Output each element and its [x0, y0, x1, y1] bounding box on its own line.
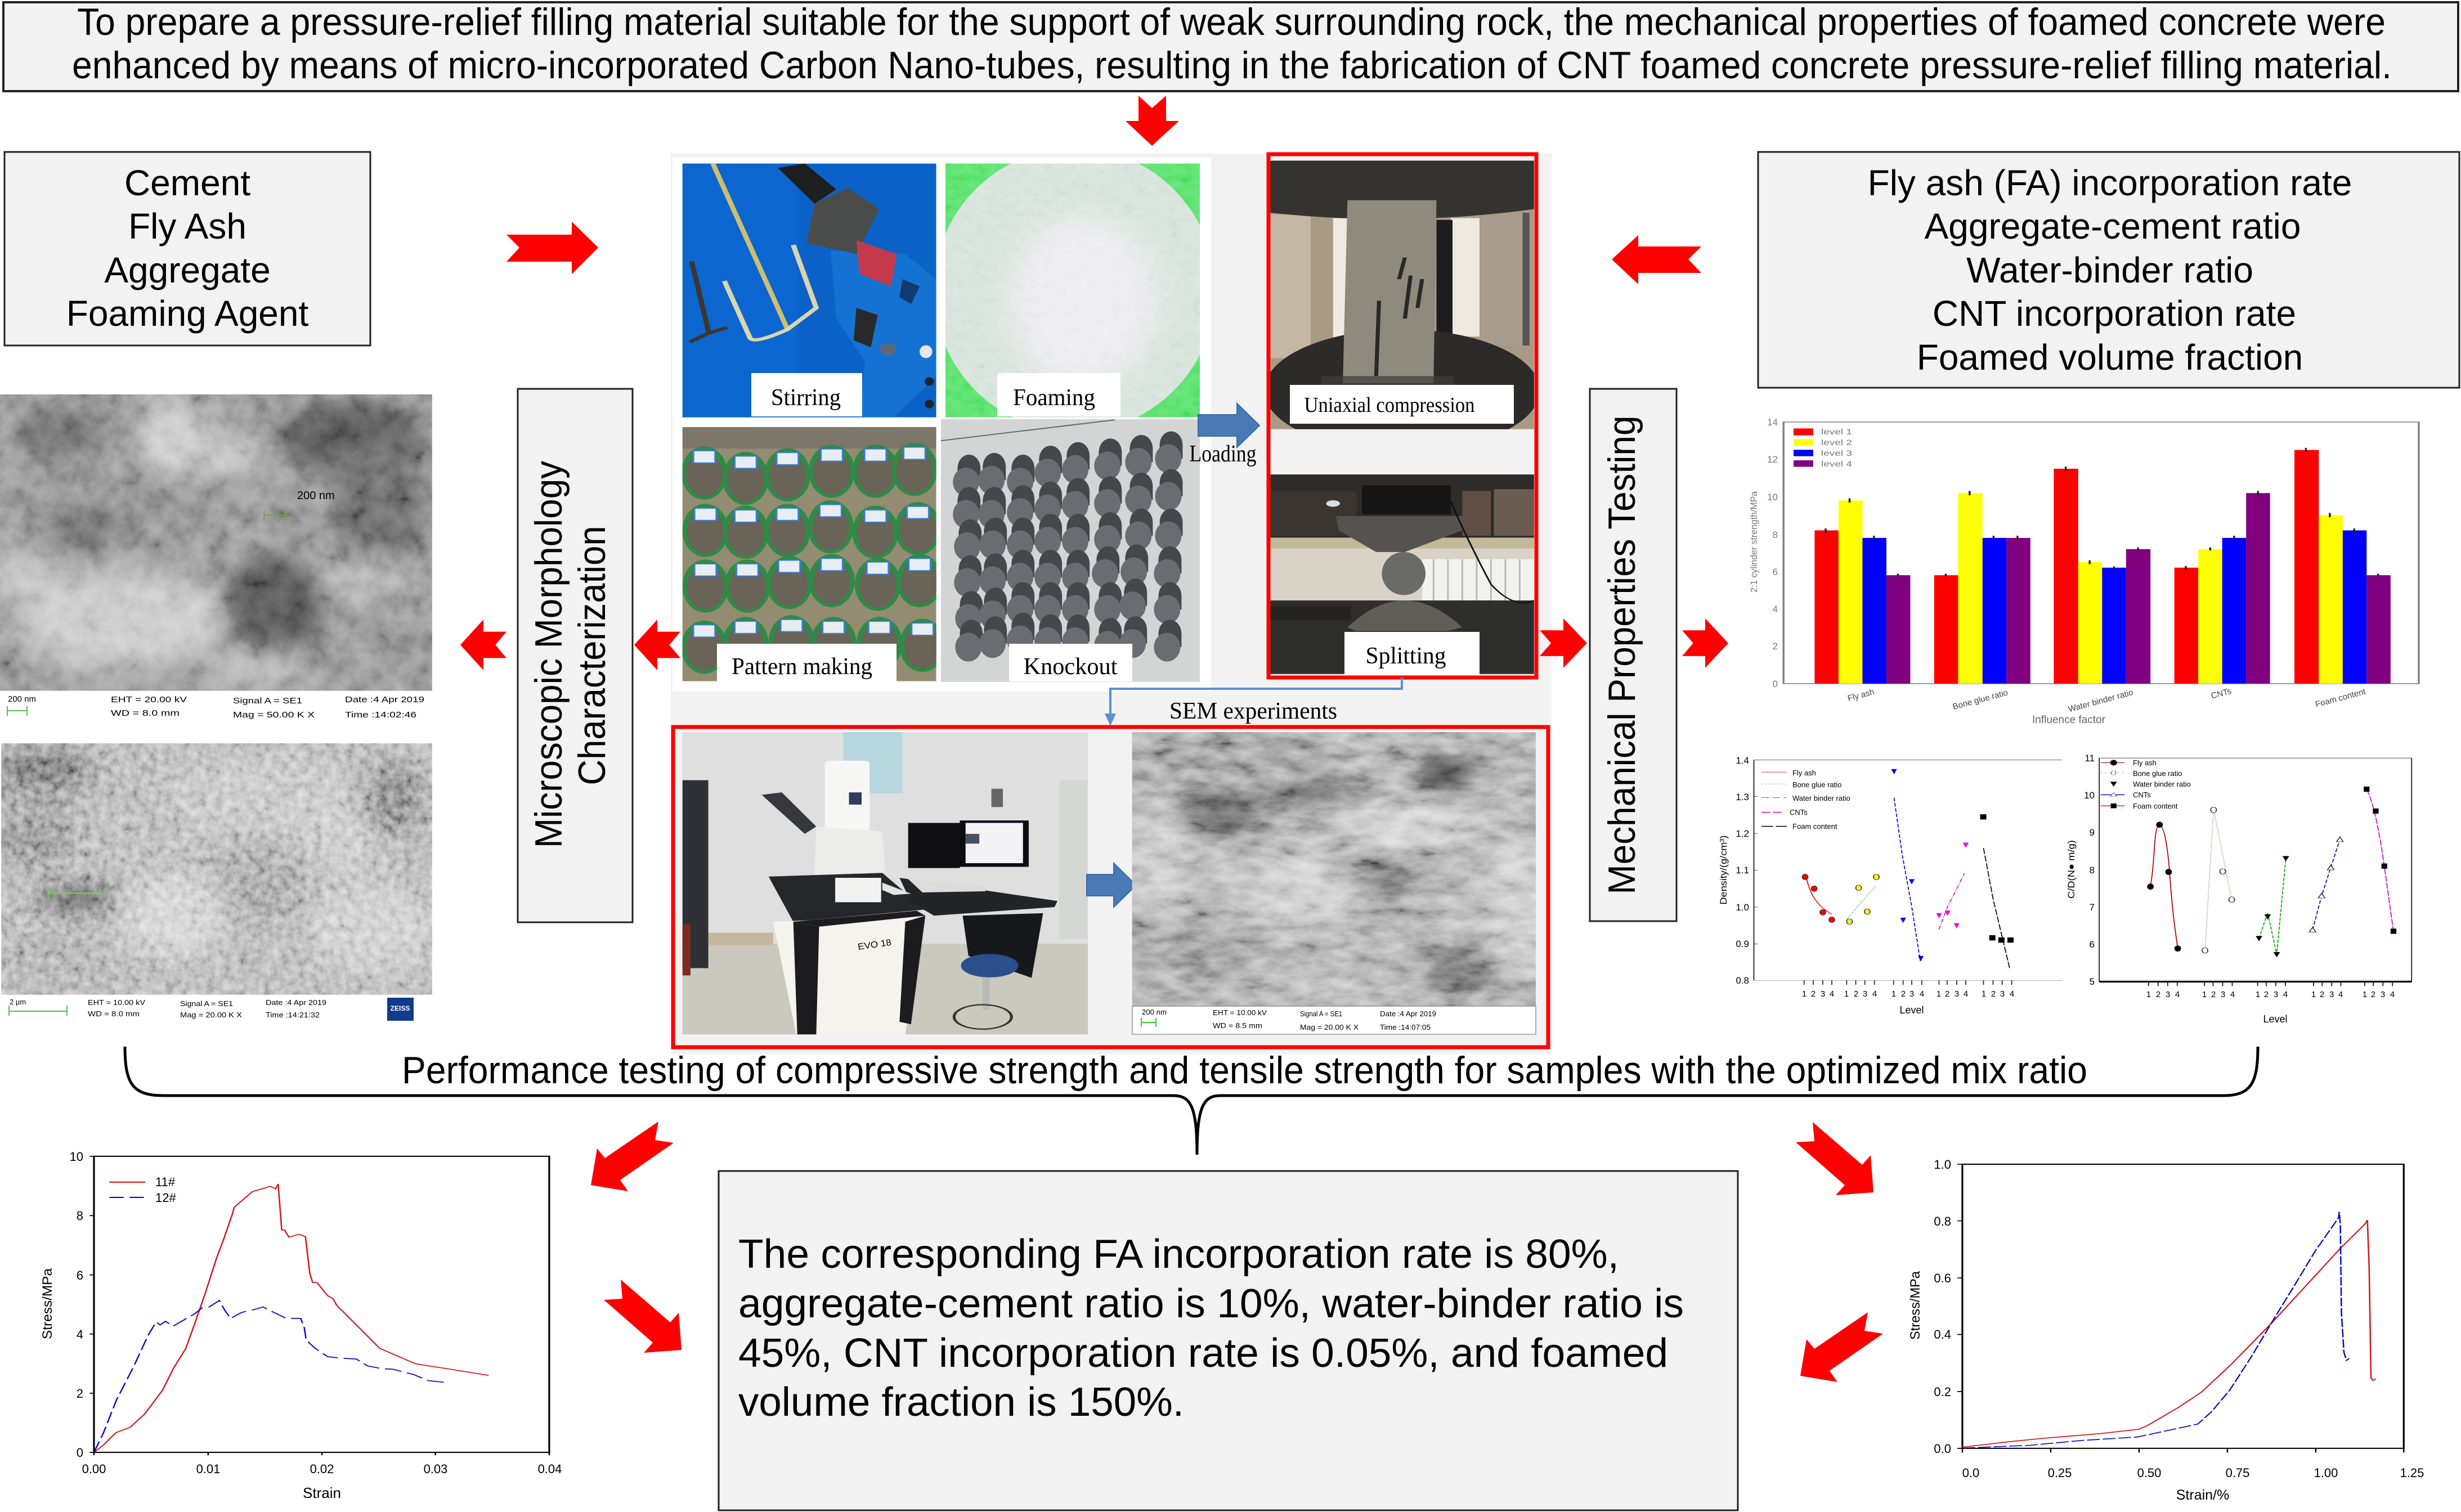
text box: optimized mix ratio result: 45%, CNT incorporation rate is 0.05%, and foamed [738, 1331, 1668, 1376]
text box: mix factors: CNT incorporation rate [1933, 293, 2296, 334]
line chart: C/D by level: 4 [2175, 990, 2180, 999]
line chart: density by level: 2 [1991, 989, 1996, 999]
caption: data bar 200 nm: Time :14:02:46 [345, 710, 416, 720]
text box: microscopic morphology: Microscopic Morphology [527, 461, 570, 848]
label: foaming: Foaming [1013, 385, 1095, 411]
photo: SEM instrument [683, 732, 1088, 1034]
text box: mix factors: Fly ash (FA) incorporation rate [1868, 163, 2352, 203]
line chart: density by level: 1 [1891, 989, 1896, 999]
photo: pattern making molds [682, 427, 945, 681]
caption: data bar 200 nm: Mag = 50.00 K X [233, 710, 315, 720]
line chart: density by level: 4 [1920, 989, 1924, 999]
text box: raw materials: Foaming Agent [66, 293, 308, 334]
text box: mix factors: Aggregate-cement ratio [1925, 206, 2301, 246]
caption: data bar 2 um: Mag = 20.00 K X [180, 1011, 242, 1019]
caption: data bar 2 um: Time :14:21:32 [266, 1011, 320, 1019]
text: performance testing: Performance testing of compressive strength and tensile strength for samples with the optimized mix ratio [402, 1049, 2087, 1092]
line chart: C/D by level [2066, 753, 2411, 1025]
line chart: tensile stress-strain: 1.0 [1934, 1157, 1951, 1172]
line chart: C/D by level: Water binder ratio [2133, 780, 2191, 788]
arrow: to charts [1682, 618, 1728, 668]
caption: SEM micrograph data bar: Mag = 20.00 K X [1300, 1023, 1359, 1031]
text box: optimized mix ratio result: aggregate-cement ratio is 10%, water-binder ratio is [738, 1281, 1684, 1326]
bar chart: cylinder strength by factor: level 4 [1821, 459, 1852, 468]
text box: research aim: To prepare a pressure-relief filling material suitable for the support of weak surrounding rock, the mechanical properties of foamed concrete were [77, 1, 2386, 43]
line chart: compressive stress-strain: 2 [77, 1387, 83, 1401]
label: knockout: Knockout [1023, 654, 1118, 680]
label: loading: Loading [1190, 441, 1256, 467]
line chart: C/D by level: 4 [2283, 990, 2288, 999]
caption: SEM micrograph data bar [1132, 1006, 1536, 1034]
image: SEM micrograph [1123, 732, 1560, 1006]
caption: data bar 2 um: Date :4 Apr 2019 [266, 998, 326, 1007]
text box: optimized mix ratio result: volume fraction is 150%. [738, 1380, 1184, 1425]
line chart: density by level: Density/(g/cm³) [1718, 835, 1729, 905]
curly bracket [125, 1047, 2258, 1155]
line chart: density by level: 1.0 [1736, 902, 1749, 913]
line chart: compressive stress-strain: 12# [155, 1191, 176, 1205]
arrow: to microscopic box [634, 620, 680, 670]
label: pattern making: Pattern making [732, 654, 872, 680]
caption: SEM micrograph data bar: Time :14:07:05 [1380, 1023, 1431, 1031]
line chart: tensile stress-strain: 0.25 [2048, 1466, 2072, 1480]
line chart: tensile stress-strain: 0.2 [1934, 1385, 1951, 1399]
photo: splitting test [1271, 474, 1534, 674]
line chart: density by level: 4 [2010, 989, 2014, 999]
line chart: density by level: 3 [1821, 989, 1825, 999]
line chart: density by level: 1 [1844, 989, 1849, 999]
bar chart: cylinder strength by factor: Water binder ratio [2067, 688, 2134, 714]
line chart: density by level: Fly ash [1792, 769, 1816, 777]
caption: data bar 2 um: EHT = 10.00 kV [88, 998, 145, 1007]
caption: data bar 200 nm: Date :4 Apr 2019 [345, 695, 424, 705]
panel: experimental process [671, 148, 1560, 1054]
line chart: compressive stress-strain: Stress/MPa [40, 1268, 55, 1339]
line chart: C/D by level: 2 [2371, 990, 2375, 999]
line chart: tensile stress-strain: 0.0 [1934, 1442, 1951, 1456]
bar chart: cylinder strength by factor: 0 [1773, 679, 1778, 689]
arrow: to mechanical box [1540, 618, 1587, 668]
line chart: density by level: Bone glue ratio [1792, 780, 1841, 789]
bar chart: cylinder strength by factor: Influence factor [2032, 714, 2106, 726]
label: stirring: Stirring [771, 385, 841, 411]
line chart: tensile stress-strain [1908, 1157, 2424, 1503]
line chart: tensile stress-strain: Stress/MPa [1908, 1271, 1923, 1340]
label: SEM experiments: SEM experiments [1169, 698, 1337, 724]
label: uniaxial compression [1290, 385, 1514, 424]
caption: data bar 200 nm: Signal A = SE1 [233, 696, 302, 706]
line chart: C/D by level: C/D(N● m/g) [2066, 840, 2077, 899]
line chart: density by level: 1 [1802, 989, 1806, 999]
arrow: to tensile chart [1796, 1122, 1873, 1195]
line chart: density by level: 4 [1830, 989, 1834, 999]
line chart: density by level: Level [1899, 1004, 1924, 1016]
arrow: to compressive chart [591, 1121, 674, 1191]
line chart: C/D by level: Level [2263, 1013, 2288, 1025]
line chart: compressive stress-strain: 6 [77, 1268, 83, 1282]
connector: SEM experiments [1105, 678, 1402, 726]
line chart: C/D by level: 11 [2085, 753, 2095, 764]
line chart: tensile stress-strain: 1.25 [2400, 1466, 2424, 1480]
label: knockout [1009, 644, 1132, 681]
text box: raw materials [5, 152, 370, 346]
line chart: C/D by level: 5 [2090, 976, 2095, 987]
line chart: compressive stress-strain: 0.01 [196, 1462, 220, 1476]
line chart: C/D by level: Foam content [2133, 802, 2178, 810]
line chart: density by level: 3 [1955, 989, 1959, 999]
caption: data bar 200 nm [0, 691, 432, 723]
line chart: density by level: 1.1 [1736, 865, 1749, 876]
bar chart: cylinder strength by factor: 12 [1767, 454, 1778, 465]
bar chart: cylinder strength by factor: level 2 [1821, 438, 1852, 447]
line chart: C/D by level: CNTs [2133, 791, 2151, 799]
arrow: factors to process [1612, 235, 1701, 284]
line chart: C/D by level: 3 [2381, 990, 2385, 999]
line chart: C/D by level: 3 [2274, 990, 2278, 999]
caption: SEM micrograph data bar: WD = 8.5 mm [1213, 1021, 1262, 1030]
line chart: compressive stress-strain: Strain [303, 1484, 341, 1501]
line chart: C/D by level: 3 [2166, 990, 2170, 999]
line chart: compressive stress-strain: 0.02 [310, 1462, 334, 1476]
line chart: compressive stress-strain: 0.03 [424, 1462, 447, 1476]
caption: SEM micrograph data bar: Signal A = SE1 [1300, 1010, 1342, 1018]
text box: mechanical properties: Mechanical Properties Testing [1601, 415, 1643, 895]
label: stirring [751, 373, 862, 416]
image: SEM micrograph 2 um [0, 743, 433, 995]
caption: data bar 200 nm: EHT = 20.00 kV [111, 695, 187, 705]
caption: SEM micrograph data bar: Date :4 Apr 2019 [1380, 1010, 1436, 1018]
arrow: compressive to result [604, 1280, 682, 1353]
line chart: density by level: 2 [1901, 989, 1906, 999]
arrow: loading [1198, 403, 1259, 447]
caption: data bar 200 nm: 200 nm [8, 694, 36, 704]
arrow: instrument to image [1087, 863, 1136, 907]
line chart: tensile stress-strain: Strain/% [2176, 1487, 2229, 1503]
line chart: C/D by level: 6 [2090, 939, 2095, 950]
text box: optimized mix ratio result: The corresponding FA incorporation rate is 80%, [738, 1232, 1619, 1277]
caption: data bar 200 nm: WD = 8.0 mm [111, 708, 180, 718]
line chart: tensile stress-strain: 0.75 [2226, 1466, 2249, 1480]
bar chart: cylinder strength by factor: Foam content [2314, 687, 2367, 710]
text box: mix factors: Water-binder ratio [1966, 250, 2253, 290]
line chart: density by level: 1.2 [1736, 828, 1749, 839]
photo: knockout specimens [941, 419, 1200, 682]
line chart: density by level: Foam content [1792, 822, 1837, 831]
bar chart: cylinder strength by factor: Fly ash [1846, 687, 1875, 703]
line chart: compressive stress-strain: 11# [155, 1175, 176, 1189]
caption: data bar 2 um: Signal A = SE1 [180, 999, 233, 1008]
photo: stirring drill [683, 164, 936, 418]
line chart: density by level: 2 [1811, 989, 1816, 999]
caption: data bar 2 um: WD = 8.0 mm [88, 1010, 140, 1018]
line chart: tensile stress-strain: 0.8 [1934, 1214, 1951, 1228]
label: splitting [1344, 632, 1480, 674]
line chart: density by level: 2 [1854, 989, 1858, 999]
line chart: density by level: 4 [1964, 989, 1968, 999]
line chart: C/D by level: 3 [2221, 990, 2225, 999]
caption: SEM micrograph data bar: 200 nm [1142, 1008, 1167, 1016]
arrow: materials to process [506, 222, 598, 274]
line chart: density by level: 1.3 [1736, 792, 1749, 802]
line chart: C/D by level: 1 [2363, 990, 2367, 999]
line chart: density by level: 1.4 [1736, 755, 1749, 766]
line chart: density by level: 0.9 [1736, 939, 1749, 949]
bar chart: cylinder strength by factor: 10 [1767, 492, 1778, 502]
line chart: compressive stress-strain [40, 1150, 562, 1501]
text box: research aim [3, 1, 2458, 91]
line chart: compressive stress-strain: 8 [77, 1209, 83, 1223]
caption: SEM micrograph data bar: EHT = 10.00 kV [1213, 1008, 1267, 1017]
line chart: tensile stress-strain: 0.6 [1934, 1271, 1951, 1285]
text box: optimized mix ratio result [719, 1171, 1738, 1510]
line chart: density by level: 3 [1909, 989, 1914, 999]
label: foaming [997, 373, 1120, 416]
group: SEM experiments [673, 727, 1560, 1047]
line chart: compressive stress-strain: 0.00 [82, 1462, 106, 1476]
bar chart: cylinder strength by factor: level 1 [1821, 427, 1852, 436]
line chart: C/D by level: 8 [2090, 865, 2095, 876]
line chart: C/D by level: 7 [2090, 902, 2095, 913]
text box: microscopic morphology [518, 389, 633, 922]
text box: mechanical properties [1590, 389, 1676, 921]
line chart: density by level: 0.8 [1736, 975, 1749, 986]
line chart: compressive stress-strain: 0.04 [538, 1462, 562, 1476]
line chart: density by level: 4 [1872, 989, 1877, 999]
label: pattern making [717, 644, 896, 681]
line chart: density by level: 3 [1863, 989, 1867, 999]
line chart: C/D by level: Bone glue ratio [2133, 769, 2182, 778]
bar chart: cylinder strength by factor: 6 [1773, 567, 1778, 577]
line chart: density by level: CNTs [1790, 808, 1808, 816]
line chart: tensile stress-strain: 1.00 [2314, 1466, 2338, 1480]
line chart: compressive stress-strain: 10 [70, 1150, 83, 1164]
line chart: C/D by level: 2 [2264, 990, 2269, 999]
line chart: C/D by level: 4 [2338, 990, 2343, 999]
line chart: C/D by level: Fly ash [2133, 759, 2157, 767]
line chart: C/D by level: 1 [2256, 990, 2260, 999]
line chart: density by level: 1 [1936, 989, 1941, 999]
line chart: tensile stress-strain: 0.0 [1962, 1466, 1979, 1480]
photo: foaming [945, 163, 1200, 418]
arrow: tensile to result [1800, 1312, 1883, 1382]
line chart: compressive stress-strain: 4 [77, 1327, 83, 1341]
bar chart: cylinder strength by factor: level 3 [1821, 448, 1852, 457]
line chart: density by level: 2 [1945, 989, 1949, 999]
line chart: C/D by level: 1 [2146, 990, 2151, 999]
group: mechanical tests [1264, 154, 1540, 678]
arrow: to SEM images [460, 620, 506, 670]
label: splitting: Splitting [1365, 643, 1446, 669]
line chart: C/D by level: 9 [2090, 827, 2095, 838]
line chart: C/D by level: 2 [2156, 990, 2160, 999]
line chart: density by level: 1 [1982, 989, 1986, 999]
line chart: compressive stress-strain: 0 [77, 1446, 83, 1460]
line chart: C/D by level: 2 [2211, 990, 2216, 999]
caption: data bar 2 um: 2 µm [10, 998, 26, 1006]
image: SEM micrograph 200 nm [0, 394, 437, 691]
line chart: density by level: Water binder ratio [1792, 794, 1850, 802]
bar chart: cylinder strength by factor: 14 [1767, 417, 1778, 428]
line chart: tensile stress-strain: 0.50 [2137, 1466, 2161, 1480]
text box: mix factors [1758, 152, 2459, 388]
line chart: density by level: 3 [2000, 989, 2005, 999]
line chart: C/D by level: 3 [2329, 990, 2334, 999]
line chart: tensile stress-strain: 0.4 [1934, 1327, 1951, 1341]
text box: mix factors: Foamed volume fraction [1917, 337, 2303, 378]
bar chart: cylinder strength by factor: 2:1 cylinder strength/MPa [1749, 491, 1759, 593]
line chart: density by level [1718, 755, 2063, 1016]
bar chart: cylinder strength by factor: Bone glue ratio [1952, 688, 2009, 712]
bar chart: cylinder strength by factor [1749, 417, 2419, 726]
text box: raw materials: Fly Ash [128, 206, 246, 246]
caption: data bar 2 um [1, 995, 432, 1021]
line chart: C/D by level: 1 [2311, 990, 2316, 999]
caption: data bar 2 um: ZEISS [391, 1004, 410, 1012]
line chart: C/D by level: 10 [2084, 790, 2095, 801]
label: EVO 18: EVO 18 [857, 938, 892, 952]
bar chart: cylinder strength by factor: CNTs [2210, 687, 2233, 701]
text box: raw materials: Aggregate [104, 250, 271, 290]
text box: microscopic morphology: Characterization [571, 526, 613, 786]
arrow: aim to experiments [1126, 96, 1179, 146]
text box: raw materials: Cement [124, 163, 250, 203]
bar chart: cylinder strength by factor: 4 [1773, 604, 1778, 614]
line chart: C/D by level: 4 [2390, 990, 2395, 999]
line chart: C/D by level: 1 [2202, 990, 2207, 999]
line chart: C/D by level: 4 [2230, 990, 2235, 999]
photo: uniaxial compression [1271, 161, 1534, 429]
label: 200 nm: 200 nm [297, 490, 335, 502]
text box: research aim: enhanced by means of micro-incorporated Carbon Nano-tubes, resulting in the fabrication of CNT foamed concrete pressure-relief filling material. [72, 44, 2392, 87]
label: uniaxial compression: Uniaxial compression [1305, 393, 1474, 417]
bar chart: cylinder strength by factor: 8 [1773, 530, 1778, 540]
bar chart: cylinder strength by factor: 2 [1773, 641, 1778, 652]
line chart: C/D by level: 2 [2320, 990, 2324, 999]
